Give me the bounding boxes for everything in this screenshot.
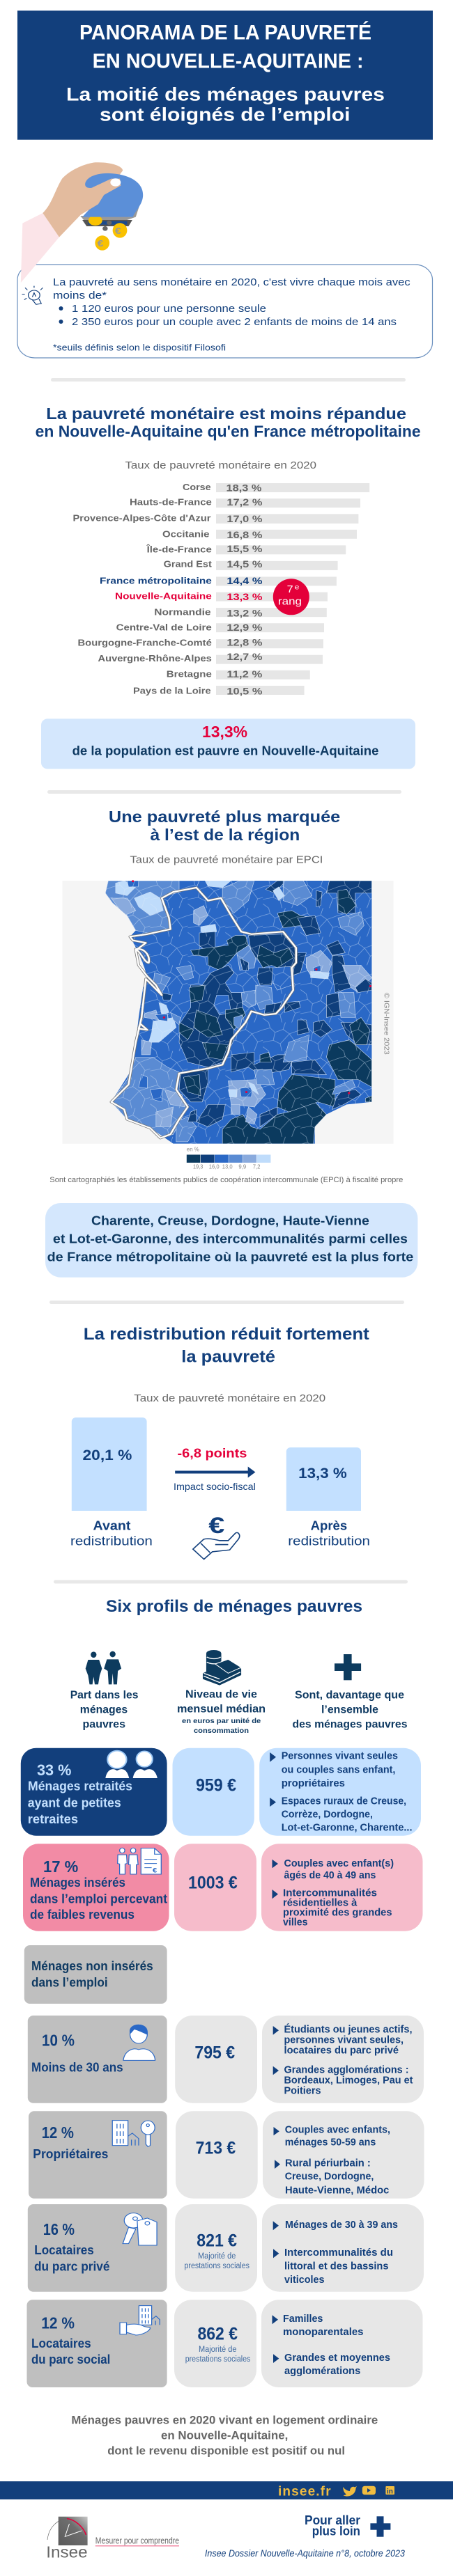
bar: after redistribution [286, 1447, 370, 1548]
bar chart: Centre-Val de Loire [116, 622, 212, 632]
row: owners [29, 2111, 424, 2199]
bar chart: Corse [183, 482, 211, 492]
row: under 30: Poitiers [284, 2084, 321, 2096]
bar: after redistribution: 13,3 % [298, 1466, 347, 1482]
heading: monetary poverty: La pauvreté monétaire est moins répandue [46, 405, 406, 423]
bar chart: 12,9 % [227, 622, 263, 633]
row: retired households: Espaces ruraux de Creuse, [282, 1796, 406, 1807]
bar chart: Hauts-de-France [130, 497, 212, 508]
bar chart: 16,8 % [227, 529, 263, 540]
bar chart: 17,2 % [227, 496, 263, 508]
column head: characteristics [293, 1654, 408, 1730]
further reading: Pour aller [305, 2513, 360, 2527]
icon: keys with tag [123, 2213, 157, 2245]
row: under 30: Grandes agglomérations : [284, 2064, 408, 2075]
bar: after redistribution: redistribution [288, 1534, 370, 1548]
socio-fiscal arrow: -6,8 points [177, 1445, 247, 1460]
bar chart: 14,4 % [227, 575, 263, 586]
row: employed low income [23, 1844, 422, 1931]
bar: before redistribution [70, 1417, 153, 1548]
scope note [71, 2414, 378, 2458]
choropleth map [63, 878, 394, 1147]
row: retired households: 959 € [196, 1776, 236, 1796]
icon: twitter [343, 2486, 357, 2497]
rank badge [273, 579, 309, 615]
bar chart: 10,5 % [227, 686, 263, 697]
illustration: hand holding purse dropping coins: € [98, 239, 104, 249]
row: retired households [21, 1748, 421, 1836]
row: employed low income: de faibles revenus [30, 1908, 135, 1922]
footer band: insee.fr [278, 2484, 331, 2499]
row: private tenants: prestations sociales [184, 2262, 249, 2270]
row: private tenants: Majorité de [198, 2252, 236, 2261]
heading: east of the region: à l’est de la région [151, 826, 300, 844]
row: under 30 [28, 2016, 424, 2103]
title banner: EN NOUVELLE-AQUITAINE : [93, 50, 364, 73]
row: under 30: Moins de 30 ans [31, 2061, 123, 2075]
column head: median income [177, 1650, 266, 1735]
row: private tenants: viticoles [284, 2274, 325, 2286]
column head: characteristics: Sont, davantage que [295, 1689, 404, 1701]
bar: before redistribution: redistribution [70, 1534, 153, 1548]
row: social tenants: 12 % [41, 2314, 75, 2332]
logo: Insee: Mesurer pour comprendre [95, 2536, 179, 2545]
row: employed low income: dans l’emploi percevant [30, 1892, 167, 1906]
icon: building and key [112, 2121, 155, 2146]
heading: redistribution: la pauvreté [181, 1347, 275, 1366]
chart subtitle: Taux de pauvreté monétaire en 2020 [125, 460, 316, 471]
row: private tenants [28, 2204, 424, 2292]
title banner [17, 10, 433, 140]
row: social tenants: Familles [283, 2313, 323, 2325]
row: retired households: Corrèze, Dordogne, [282, 1809, 373, 1821]
row: employed low income: 1003 € [188, 1874, 238, 1893]
bar chart: 12,8 % [227, 636, 263, 647]
heading: redistribution: La redistribution réduit fortement [84, 1325, 369, 1344]
column head: share: pauvres [82, 1718, 125, 1730]
logo: Insee [46, 2517, 179, 2561]
row: under 30: Bordeaux, Limoges, Pau et [284, 2074, 413, 2086]
heading: east of the region: Une pauvreté plus marquée [109, 808, 340, 826]
definition callout: *seuils définis selon le dispositif Filosofi [53, 343, 226, 352]
definition callout: La pauvreté au sens monétaire en 2020, c'est vivre chaque mois avec [53, 276, 410, 288]
bar chart: Bourgogne-Franche-Comté [78, 637, 212, 647]
map legend: 9,9 [238, 1164, 247, 1170]
map conclusion box: Charente, Creuse, Dordogne, Haute-Vienne [91, 1214, 369, 1227]
row: employed low income: Ménages insérés [30, 1876, 125, 1890]
bar chart: 13,2 % [227, 608, 263, 619]
row: social tenants: Majorité de [199, 2346, 237, 2354]
illustration: hand holding purse dropping coins [21, 162, 143, 283]
row: social tenants: monoparentales [283, 2326, 364, 2338]
row: private tenants: du parc privé [34, 2259, 110, 2273]
map conclusion box [45, 1203, 417, 1278]
title banner: PANORAMA DE LA PAUVRETÉ [79, 21, 371, 45]
map legend: 13,0 [222, 1164, 233, 1170]
row: employed low income: villes [283, 1916, 308, 1928]
illustration: hand holding purse dropping coins: € [115, 226, 121, 237]
map subtitle: Taux de pauvreté monétaire par EPCI [130, 854, 323, 865]
bar chart: Pays de la Loire [133, 685, 211, 696]
footer band [0, 2481, 453, 2499]
row: employed low income: proximité des grandes [283, 1906, 392, 1918]
map legend [187, 1146, 270, 1170]
bar chart: 12,7 % [227, 651, 263, 662]
rank badge: rang [278, 596, 302, 608]
definition callout: 2 350 euros pour un couple avec 2 enfants de moins de 14 ans [72, 316, 397, 328]
bar chart: Île-de-France [146, 544, 212, 555]
bar chart [72, 482, 369, 697]
row: under 30: Étudiants ou jeunes actifs, [284, 2023, 413, 2035]
row: social tenants: agglomérations [284, 2365, 360, 2377]
panel: six household profiles [21, 1597, 424, 2387]
row: retired households: propriétaires [282, 1777, 345, 1789]
bar chart: Provence-Alpes-Côte d'Azur [72, 512, 210, 524]
row: owners: Haute-Vienne, Médoc [285, 2184, 389, 2196]
icon: light bulb [22, 286, 43, 304]
icon: workers and pay slip: € [153, 1867, 157, 1874]
row: social tenants: Locataires [31, 2337, 91, 2350]
socio-fiscal arrow [174, 1445, 256, 1492]
group header: not in employment [24, 1945, 167, 2004]
row: owners: Rural périurbain : [285, 2157, 371, 2169]
definition callout [17, 265, 432, 358]
row: retired households: Ménages retraités [28, 1780, 132, 1793]
map legend: en % [187, 1146, 199, 1153]
row: employed low income: résidentielles à [283, 1896, 358, 1908]
heading: redistribution [84, 1325, 369, 1366]
column head: share: Part dans les [70, 1689, 139, 1701]
heading: monetary poverty: en Nouvelle-Aquitaine qu'en France métropolitaine [36, 422, 421, 440]
row: private tenants: 821 € [197, 2231, 237, 2251]
row: social tenants: Grandes et moyennes [284, 2352, 390, 2364]
row: owners: Creuse, Dordogne, [285, 2170, 374, 2182]
map legend: 16,0 [209, 1164, 220, 1170]
key figure box: de la population est pauvre en Nouvelle-Aquitaine [72, 744, 378, 758]
icon: linkedin [385, 2486, 394, 2495]
row: under 30: 795 € [194, 2043, 235, 2063]
bar chart: 18,3 % [226, 482, 262, 493]
further reading: plus loin [312, 2524, 360, 2538]
column head: characteristics: l’ensemble [321, 1704, 378, 1715]
scope note: dont le revenu disponible est positif ou nul [107, 2444, 345, 2458]
panel: regional bar chart [36, 378, 421, 769]
row: private tenants: Ménages de 30 à 39 ans [285, 2219, 398, 2231]
scope note: Ménages pauvres en 2020 vivant en logement ordinaire [71, 2414, 378, 2427]
row: social tenants: prestations sociales [185, 2355, 251, 2364]
definition callout: moins de* [53, 290, 107, 301]
bar chart: Bretagne [167, 669, 212, 680]
map legend: 7,2 [253, 1164, 261, 1170]
row: private tenants: littoral et des bassins [284, 2260, 389, 2272]
map legend: 19,3 [193, 1164, 204, 1170]
column head: median income: Niveau de vie [185, 1688, 257, 1700]
key figure box: 13,3% [202, 723, 247, 741]
column head: median income: en euros par unité de [182, 1717, 261, 1725]
bar chart: 17,0 % [227, 513, 263, 524]
bar chart: 15,5 % [227, 543, 263, 554]
bar chart: Grand Est [164, 559, 213, 570]
row: under 30: 10 % [42, 2031, 75, 2049]
row: retired households: ou couples sans enfant, [282, 1764, 395, 1776]
row: retired households: 33 % [37, 1761, 71, 1779]
bar: before redistribution: 20,1 % [82, 1447, 132, 1463]
icon: youtube [362, 2486, 376, 2495]
bar chart: France métropolitaine [100, 576, 212, 586]
title banner: sont éloignés de l’emploi [100, 104, 350, 125]
column head: characteristics: des ménages pauvres [293, 1718, 408, 1730]
bar: before redistribution: Avant [93, 1519, 130, 1533]
bar chart: Auvergne-Rhône-Alpes [98, 653, 212, 663]
column head: median income: mensuel médian [177, 1703, 266, 1715]
row: social tenants: du parc social [31, 2353, 110, 2366]
group header: not in employment: Ménages non insérés [31, 1959, 153, 1973]
heading: east of the region [109, 808, 340, 844]
bar chart: Occitanie [162, 529, 209, 539]
row: retired households: Personnes vivant seules [282, 1750, 398, 1762]
row: retired households: retraites [28, 1812, 78, 1826]
group header: not in employment: dans l’emploi [31, 1975, 108, 1989]
title banner: La moitié des ménages pauvres [66, 84, 385, 104]
row: employed low income: Intercommunalités [283, 1887, 377, 1899]
scope note: en Nouvelle-Aquitaine, [161, 2429, 288, 2442]
row: social tenants: 862 € [198, 2324, 238, 2343]
icon: young person [123, 2025, 155, 2060]
row: private tenants: Intercommunalités du [284, 2247, 393, 2259]
row: private tenants: 16 % [43, 2220, 75, 2238]
choropleth map: © IGN-Insee 2023 [382, 993, 390, 1055]
heading: six profiles: Six profils de ménages pauvres [106, 1597, 362, 1616]
row: employed low income: Couples avec enfant(s) [284, 1858, 394, 1869]
row: owners: 713 € [196, 2138, 236, 2158]
row: under 30: personnes vivant seules, [284, 2034, 404, 2045]
logo: Insee: Insee [46, 2543, 88, 2561]
row: owners: Couples avec enfants, [285, 2123, 390, 2135]
bar chart: 13,3 % [227, 591, 263, 602]
bar: after redistribution: Après [311, 1519, 347, 1533]
icon: hand holding building [120, 2306, 160, 2335]
column head: share [70, 1651, 139, 1730]
bar chart: 11,2 % [227, 668, 263, 680]
redistribution subtitle: Taux de pauvreté monétaire en 2020 [134, 1393, 325, 1404]
map note: Sont cartographiés les établissements publics de coopération intercommunale (EPCI) à fiscalité propre [49, 1176, 403, 1184]
map conclusion box: de France métropolitaine où la pauvreté est la plus forte [47, 1250, 413, 1264]
row: owners: 12 % [42, 2123, 74, 2142]
column head: share: ménages [80, 1704, 128, 1715]
key figure box [41, 718, 415, 769]
definition callout: 1 120 euros pour une personne seule [72, 303, 266, 315]
icon: workers and pay slip [118, 1848, 161, 1874]
bar chart: Normandie [154, 606, 211, 617]
row: retired households: ayant de petites [28, 1796, 121, 1810]
icon: linkedin: in [387, 2488, 393, 2495]
panel: redistribution [70, 1325, 370, 1560]
icon: euro in hand: € [208, 1513, 225, 1538]
row: employed low income: âgés de 40 à 49 ans [284, 1869, 376, 1881]
socio-fiscal arrow: Impact socio-fiscal [174, 1481, 256, 1492]
panel: map section [45, 808, 417, 1278]
further reading [205, 2513, 405, 2559]
row: employed low income: 17 % [43, 1858, 78, 1876]
bar chart: 14,5 % [227, 558, 263, 570]
row: retired households: Lot-et-Garonne, Charente... [282, 1822, 413, 1834]
row: owners: Propriétaires [33, 2147, 108, 2161]
heading: monetary poverty [36, 405, 421, 440]
icon: elderly couple [105, 1751, 158, 1778]
icon: euro in hand [193, 1513, 240, 1560]
row: under 30: locataires du parc privé [284, 2044, 399, 2056]
row: social tenants [26, 2300, 422, 2387]
further reading: Insee Dossier Nouvelle-Aquitaine n°8, octobre 2023 [205, 2547, 405, 2559]
row: private tenants: Locataires [34, 2243, 94, 2257]
column head: median income: consommation [194, 1727, 249, 1735]
bar chart: Nouvelle-Aquitaine [115, 590, 212, 601]
row: owners: ménages 50-59 ans [285, 2136, 376, 2148]
map conclusion box: et Lot-et-Garonne, des intercommunalités parmi celles [53, 1232, 408, 1246]
rank badge: 7 [287, 583, 293, 595]
rank badge: e [295, 584, 300, 592]
